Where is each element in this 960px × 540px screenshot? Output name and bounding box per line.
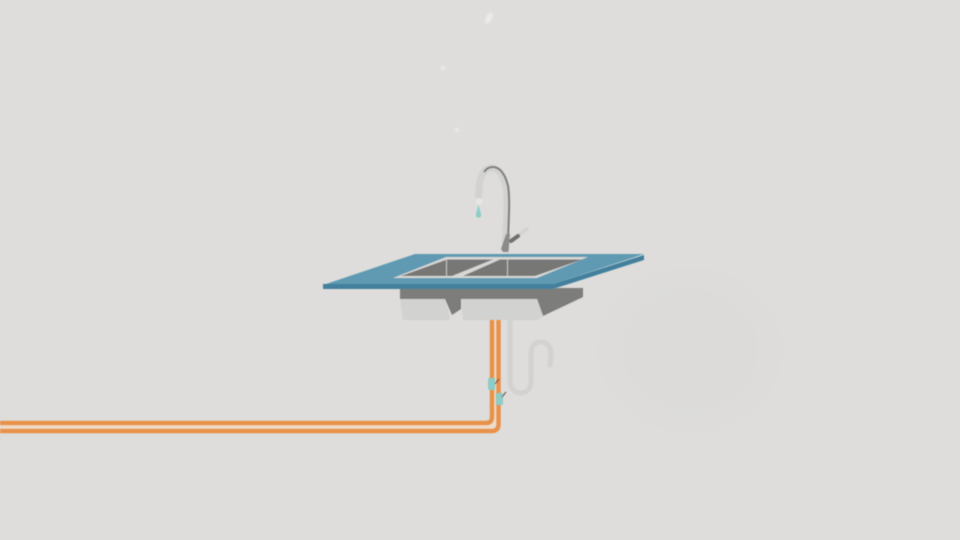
countertop <box>323 254 644 289</box>
faucet lever <box>512 229 527 240</box>
left basin bottom <box>400 299 450 320</box>
drain trap pipe <box>510 318 551 393</box>
leak on upper pipe <box>488 378 499 390</box>
faucet neck light side <box>478 168 507 250</box>
left basin <box>401 260 493 276</box>
sink rim <box>393 257 588 278</box>
water drop <box>476 205 481 218</box>
faucet neck dark side <box>484 167 509 250</box>
right basin <box>463 260 582 276</box>
faucet base <box>501 234 510 252</box>
orange water pipes <box>0 318 498 431</box>
right basin bottom <box>461 299 543 320</box>
leak on lower pipe <box>496 392 506 405</box>
faucet head <box>476 199 482 204</box>
shadowed sink body <box>400 288 583 316</box>
faucet <box>476 167 527 252</box>
sink underside <box>400 288 583 320</box>
